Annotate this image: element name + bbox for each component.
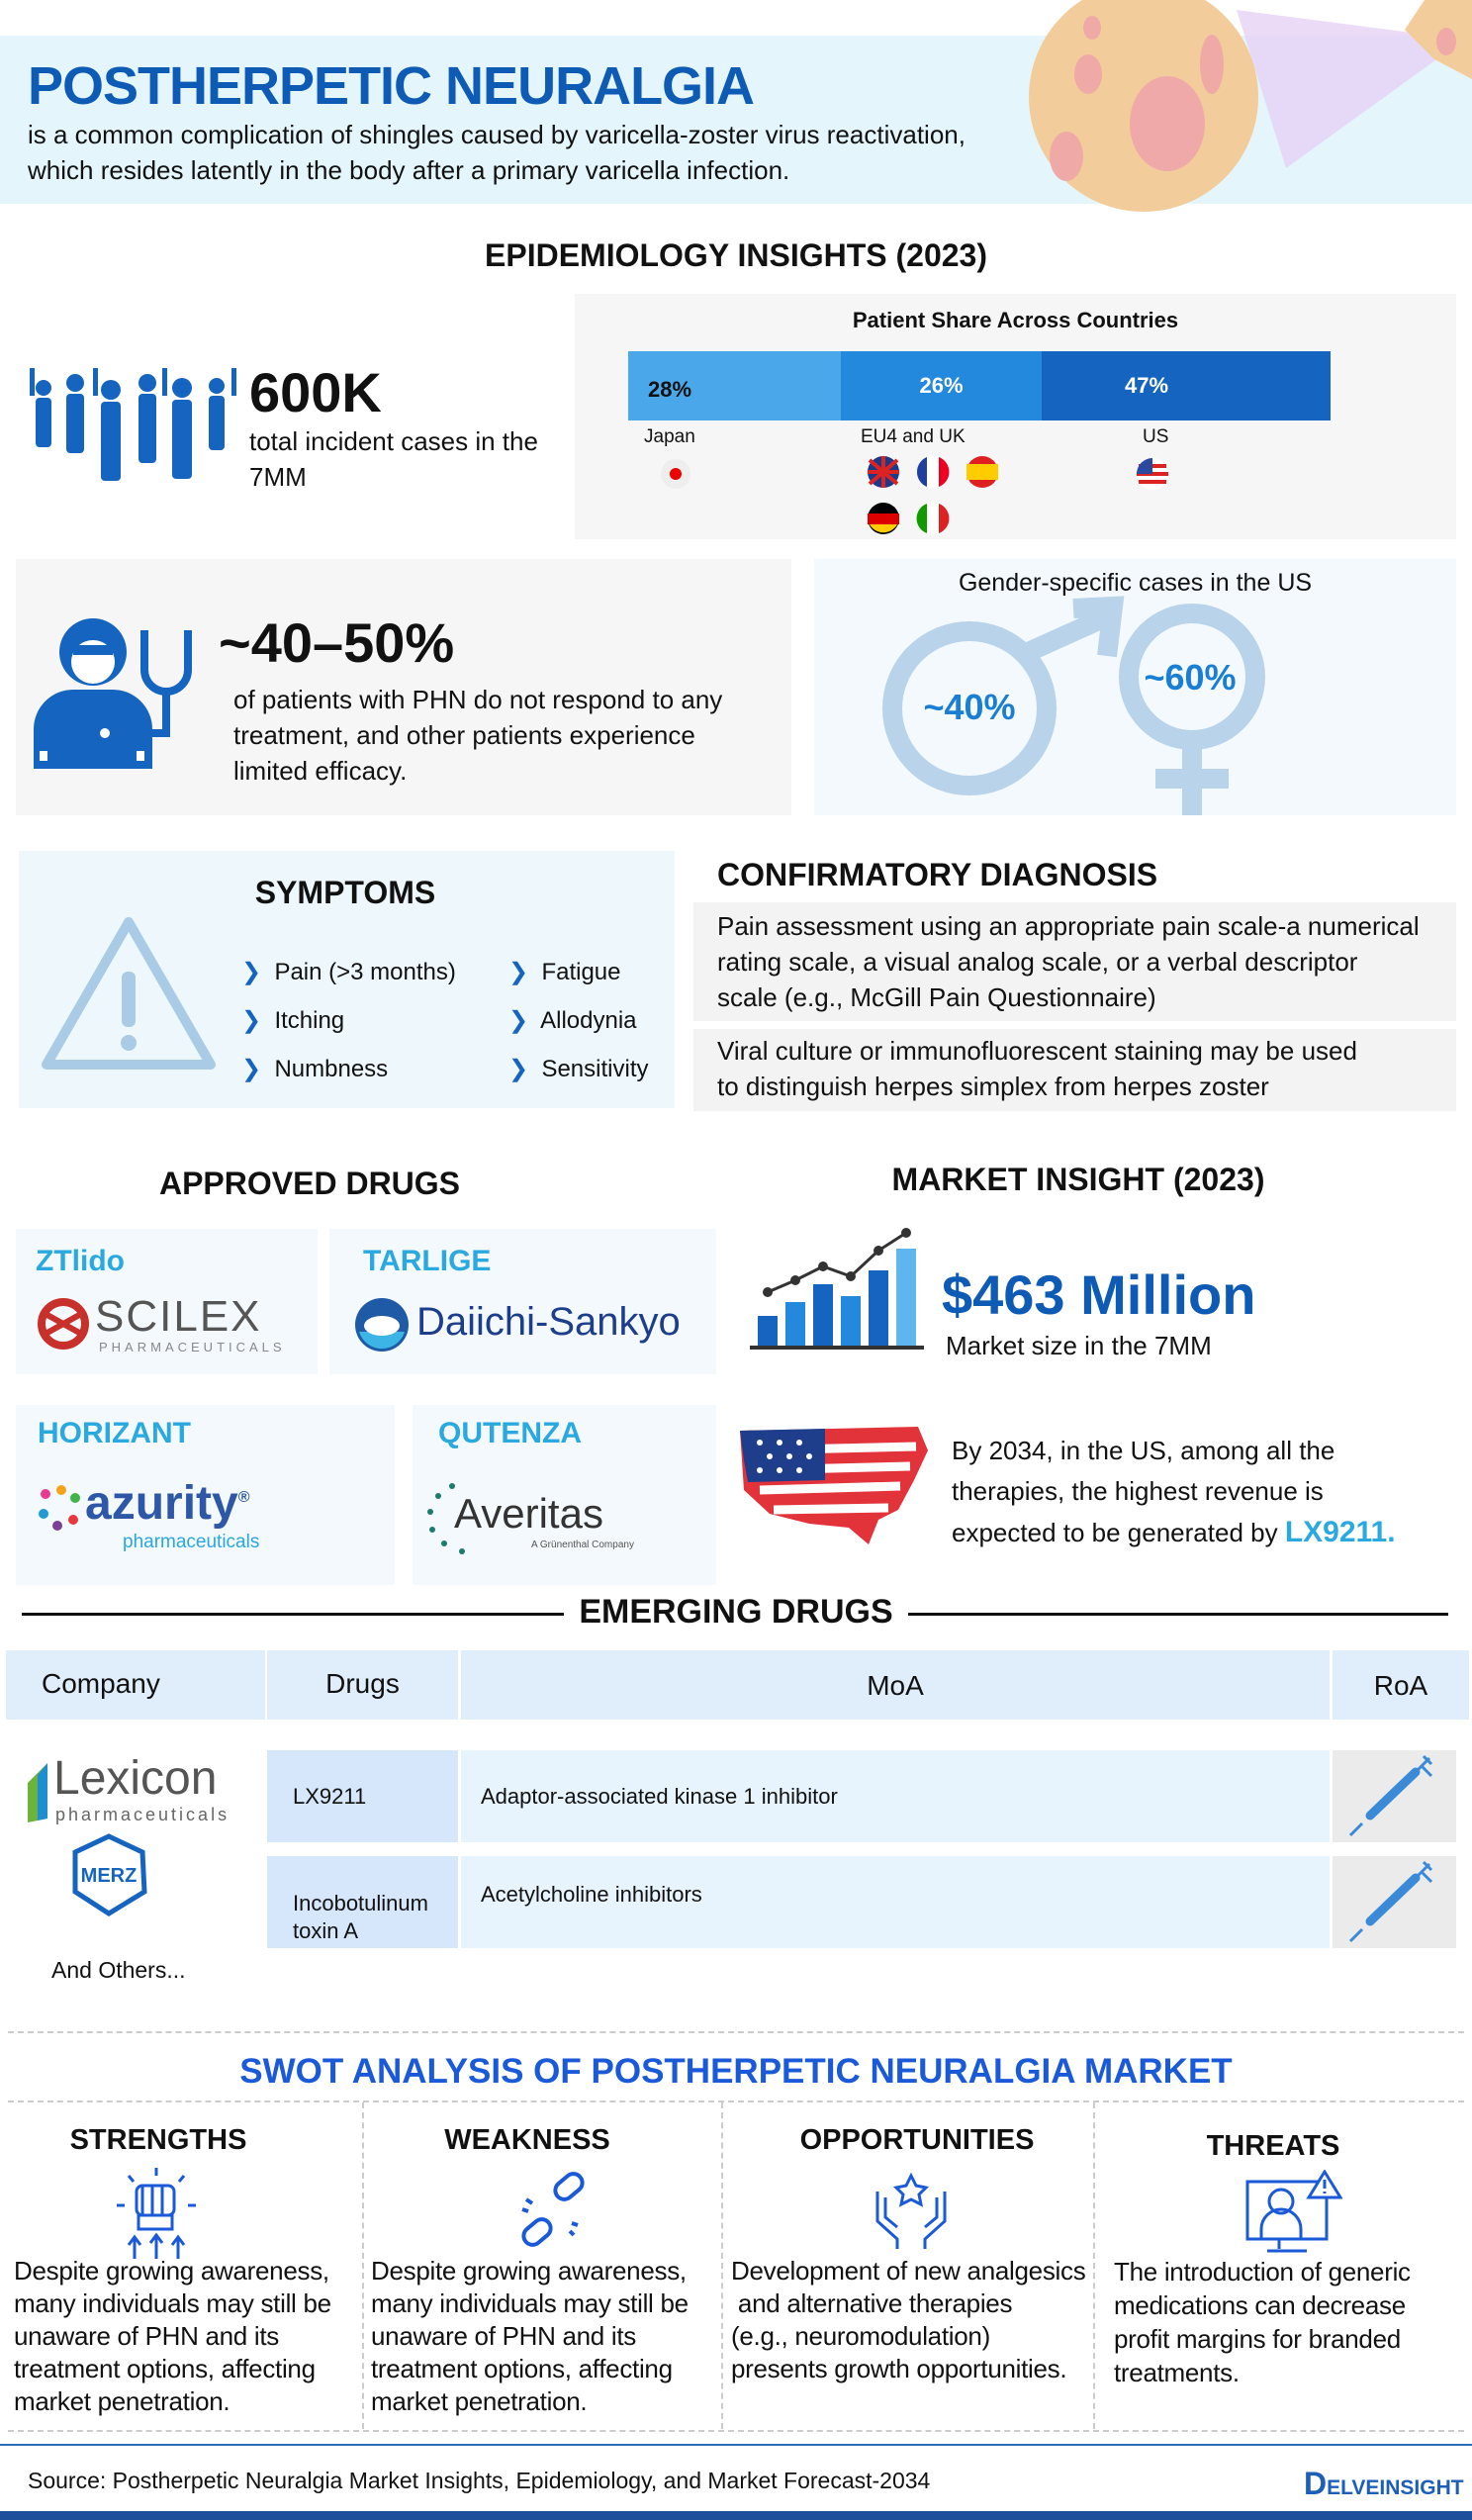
legend labels: Japan: [644, 426, 695, 447]
text: weakness: treatment options, affecting: [371, 2354, 673, 2383]
panel: patient share: EU4 and UK: [861, 426, 966, 447]
card: TARLIGE: [329, 1229, 716, 1374]
icon: bar chart growth: [750, 1228, 924, 1350]
logo: daiichi-sankyo: Daiichi-Sankyo: [416, 1300, 681, 1344]
panel: 600K: [30, 361, 538, 492]
symptoms heading: SYMPTOMS: [255, 875, 435, 910]
logo: scilex: PHARMACEUTICALS: [99, 1340, 286, 1354]
symptom list: ❯ Pain (>3 months): [241, 959, 456, 985]
logo: averitas: A Grünenthal Company: [531, 1540, 634, 1550]
subtitle: is a common complication of shingles caused by varicella-zoster virus reactivation,: [28, 120, 966, 149]
icon: broken chain: [521, 2172, 585, 2247]
box: viral culture: [693, 1029, 1456, 1111]
logo: averitas: Averitas: [454, 1490, 603, 1537]
text: opportunities: Development of new analgesics: [731, 2256, 1085, 2286]
box: pain assessment: [693, 902, 1456, 1021]
text: incident cases: 7MM: [249, 462, 307, 492]
symptom list: [241, 959, 649, 1082]
heading: approved drugs: APPROVED DRUGS: [159, 1166, 460, 1201]
logo: lexicon: pharmaceuticals: [55, 1805, 230, 1824]
text: non-response: limited efficacy.: [233, 756, 407, 786]
symptom list: ❯ Allodynia: [508, 1007, 637, 1034]
text: weakness: unaware of PHN and its: [371, 2321, 636, 2351]
heading: confirmatory diagnosis: CONFIRMATORY DIAGNOSIS: [717, 857, 1157, 892]
text: non-response: [233, 685, 722, 786]
panel: strengths: STRENGTHS: [70, 2124, 246, 2156]
icon: warning: [42, 917, 216, 1070]
stat: 40-50%: ~40–50%: [219, 611, 454, 674]
heading: SWOT: SWOT ANALYSIS OF POSTHERPETIC NEURALGIA MARKET: [239, 2052, 1233, 2091]
bar chart: [628, 351, 1331, 420]
logo: azurity: azurity®: [85, 1477, 250, 1530]
row: incobotulinum: Incobotulinum toxin A: [293, 1891, 428, 1943]
card: QUTENZA: [413, 1405, 716, 1585]
bar chart: 26%: [919, 373, 964, 398]
panel: patient share: [575, 294, 1456, 539]
text: incident cases: total incident cases in the: [249, 426, 538, 456]
row: LX9211: LX9211: [293, 1784, 366, 1809]
card: TARLIGE: TARLIGE: [363, 1245, 491, 1277]
table header: RoA: [1374, 1670, 1427, 1701]
text: strengths: [14, 2256, 331, 2416]
card: QUTENZA: QUTENZA: [438, 1417, 582, 1449]
bar chart: 28%: [648, 377, 691, 402]
row: incobotulinum: Acetylcholine inhibitors: [481, 1882, 702, 1907]
panel: non-responders: [16, 559, 791, 815]
icon: people crowd: [30, 368, 236, 481]
box: viral culture: Viral culture or immunofluorescent staining may be used: [717, 1036, 1357, 1066]
text: strengths: unaware of PHN and its: [14, 2321, 279, 2351]
box: pain assessment: Pain assessment using an appropriate pain scale-a numerical: [717, 911, 1420, 941]
panel: weakness: [371, 2124, 689, 2416]
text: strengths: market penetration.: [14, 2386, 230, 2416]
text: and others: And Others...: [51, 1957, 186, 1983]
table header: [6, 1650, 1469, 1720]
icon: doctor: [34, 618, 192, 769]
panel: threats: THREATS: [1207, 2130, 1339, 2162]
logo: lexicon: Lexicon: [53, 1752, 217, 1805]
icon: hands with star: [876, 2173, 946, 2249]
icon: monitor warning: [1246, 2170, 1342, 2252]
icon: gender symbols: ~40%: [923, 687, 1016, 727]
text: LX9211 forecast: By 2034, in the US, among all the: [952, 1436, 1334, 1465]
logo: averitas: [427, 1483, 634, 1554]
heading: epidemiology: EPIDEMIOLOGY INSIGHTS (2023): [485, 237, 987, 273]
card: ZTlido: ZTlido: [36, 1245, 125, 1277]
heading: market insight: MARKET INSIGHT (2023): [892, 1162, 1264, 1197]
symptom list: ❯ Fatigue: [508, 959, 621, 985]
bar chart: 47%: [1125, 373, 1168, 398]
text: threats: The introduction of generic: [1114, 2257, 1411, 2287]
panel: weakness: WEAKNESS: [444, 2124, 610, 2156]
panel: gender: [814, 559, 1456, 815]
box: pain assessment: scale (e.g., McGill Pain Questionnaire): [717, 982, 1156, 1012]
text: strengths: Despite growing awareness,: [14, 2256, 329, 2286]
heading: emerging drugs: EMERGING DRUGS: [579, 1593, 893, 1631]
logo: azurity: pharmaceuticals: [123, 1532, 259, 1552]
text: non-response: treatment, and other patients experience: [233, 720, 695, 750]
panel: strengths: [14, 2124, 331, 2416]
panel: patient share: US: [1143, 426, 1168, 447]
text: strengths: many individuals may still be: [14, 2288, 331, 2318]
text: LX9211 forecast: expected to be generated by LX9211.: [952, 1516, 1396, 1548]
logo: merz: MERZ: [81, 1865, 137, 1887]
icon: syringe: [1333, 1856, 1456, 1948]
icon: gender symbols: [882, 596, 1265, 815]
chart title: Patient Share Across Countries: [853, 308, 1178, 332]
footer: [0, 2444, 1472, 2518]
table header: Company: [42, 1668, 160, 1699]
logo: lexicon: [28, 1752, 230, 1824]
symptom list: ❯ Itching: [241, 1007, 344, 1034]
text: opportunities: [731, 2256, 1085, 2383]
heading: emerging drugs: [22, 1593, 1448, 1631]
logo: scilex: [38, 1292, 286, 1354]
panel: symptoms: [19, 851, 675, 1108]
logo: azurity: [39, 1477, 259, 1552]
text: opportunities: presents growth opportunities.: [731, 2354, 1066, 2383]
row: LX9211: [267, 1750, 1456, 1842]
card: ZTlido: [16, 1229, 318, 1374]
symptom list: ❯ Sensitivity: [508, 1056, 648, 1082]
logo: scilex: SCILEX: [95, 1292, 262, 1341]
table: emerging drugs: [6, 1650, 1469, 1983]
text: opportunities: (e.g., neuromodulation): [731, 2321, 990, 2351]
text: LX9211 forecast: therapies, the highest revenue is: [952, 1476, 1324, 1506]
icon: fist: [117, 2168, 196, 2259]
text: incident cases: [249, 426, 538, 492]
text: LX9211 forecast: [952, 1436, 1396, 1548]
text: weakness: [371, 2256, 689, 2416]
icon: syringe: [1333, 1750, 1456, 1842]
subtitle: which resides latently in the body after a primary varicella infection.: [28, 155, 789, 185]
table header: MoA: [867, 1670, 924, 1701]
text: threats: [1114, 2257, 1411, 2387]
icon: US flag map: [740, 1427, 928, 1544]
card: HORIZANT: [16, 1405, 395, 1585]
text: non-response: of patients with PHN do not respond to any: [233, 685, 722, 714]
logo: delveinsight: DELVEINSIGHT: [1304, 2466, 1464, 2501]
gender title: Gender-specific cases in the US: [959, 569, 1312, 597]
text: market size: Market size in the 7MM: [946, 1331, 1212, 1360]
stat: market size: $463 Million: [942, 1263, 1255, 1326]
panel: threats: [1114, 2130, 1411, 2387]
text: source: Source: Postherpetic Neuralgia Market Insights, Epidemiology, and Market Forecast-2034: [28, 2468, 930, 2493]
table header: Drugs: [325, 1668, 400, 1699]
card: HORIZANT: HORIZANT: [38, 1417, 191, 1449]
stat: 600K: 600K: [249, 361, 382, 423]
row: incobotulinum: [267, 1856, 1456, 1948]
logo: merz: [73, 1833, 147, 1916]
box: viral culture: to distinguish herpes simplex from herpes zoster: [717, 1072, 1269, 1101]
text: opportunities: and alternative therapies: [738, 2288, 1012, 2318]
symptom list: ❯ Numbness: [241, 1056, 388, 1082]
text: threats: treatments.: [1114, 2358, 1240, 2387]
box: pain assessment: rating scale, a visual analog scale, or a verbal descriptor: [717, 947, 1357, 977]
subtitle: [28, 120, 966, 185]
title: POSTHERPETIC NEURALGIA: [28, 56, 754, 116]
icon: gender symbols: ~60%: [1144, 657, 1237, 698]
logo: daiichi-sankyo: [355, 1298, 681, 1352]
text: weakness: market penetration.: [371, 2386, 587, 2416]
header band: [0, 36, 1472, 204]
flags: [670, 456, 1168, 534]
text: strengths: treatment options, affecting: [14, 2354, 316, 2383]
text: threats: medications can decrease: [1114, 2290, 1406, 2320]
row: LX9211: Adaptor-associated kinase 1 inhibitor: [481, 1784, 838, 1809]
text: weakness: Despite growing awareness,: [371, 2256, 687, 2286]
panel: opportunities: [731, 2124, 1085, 2383]
text: threats: profit margins for branded: [1114, 2324, 1401, 2354]
text: weakness: many individuals may still be: [371, 2288, 689, 2318]
icon: skin rash: [1029, 0, 1472, 212]
panel: opportunities: OPPORTUNITIES: [800, 2124, 1034, 2156]
